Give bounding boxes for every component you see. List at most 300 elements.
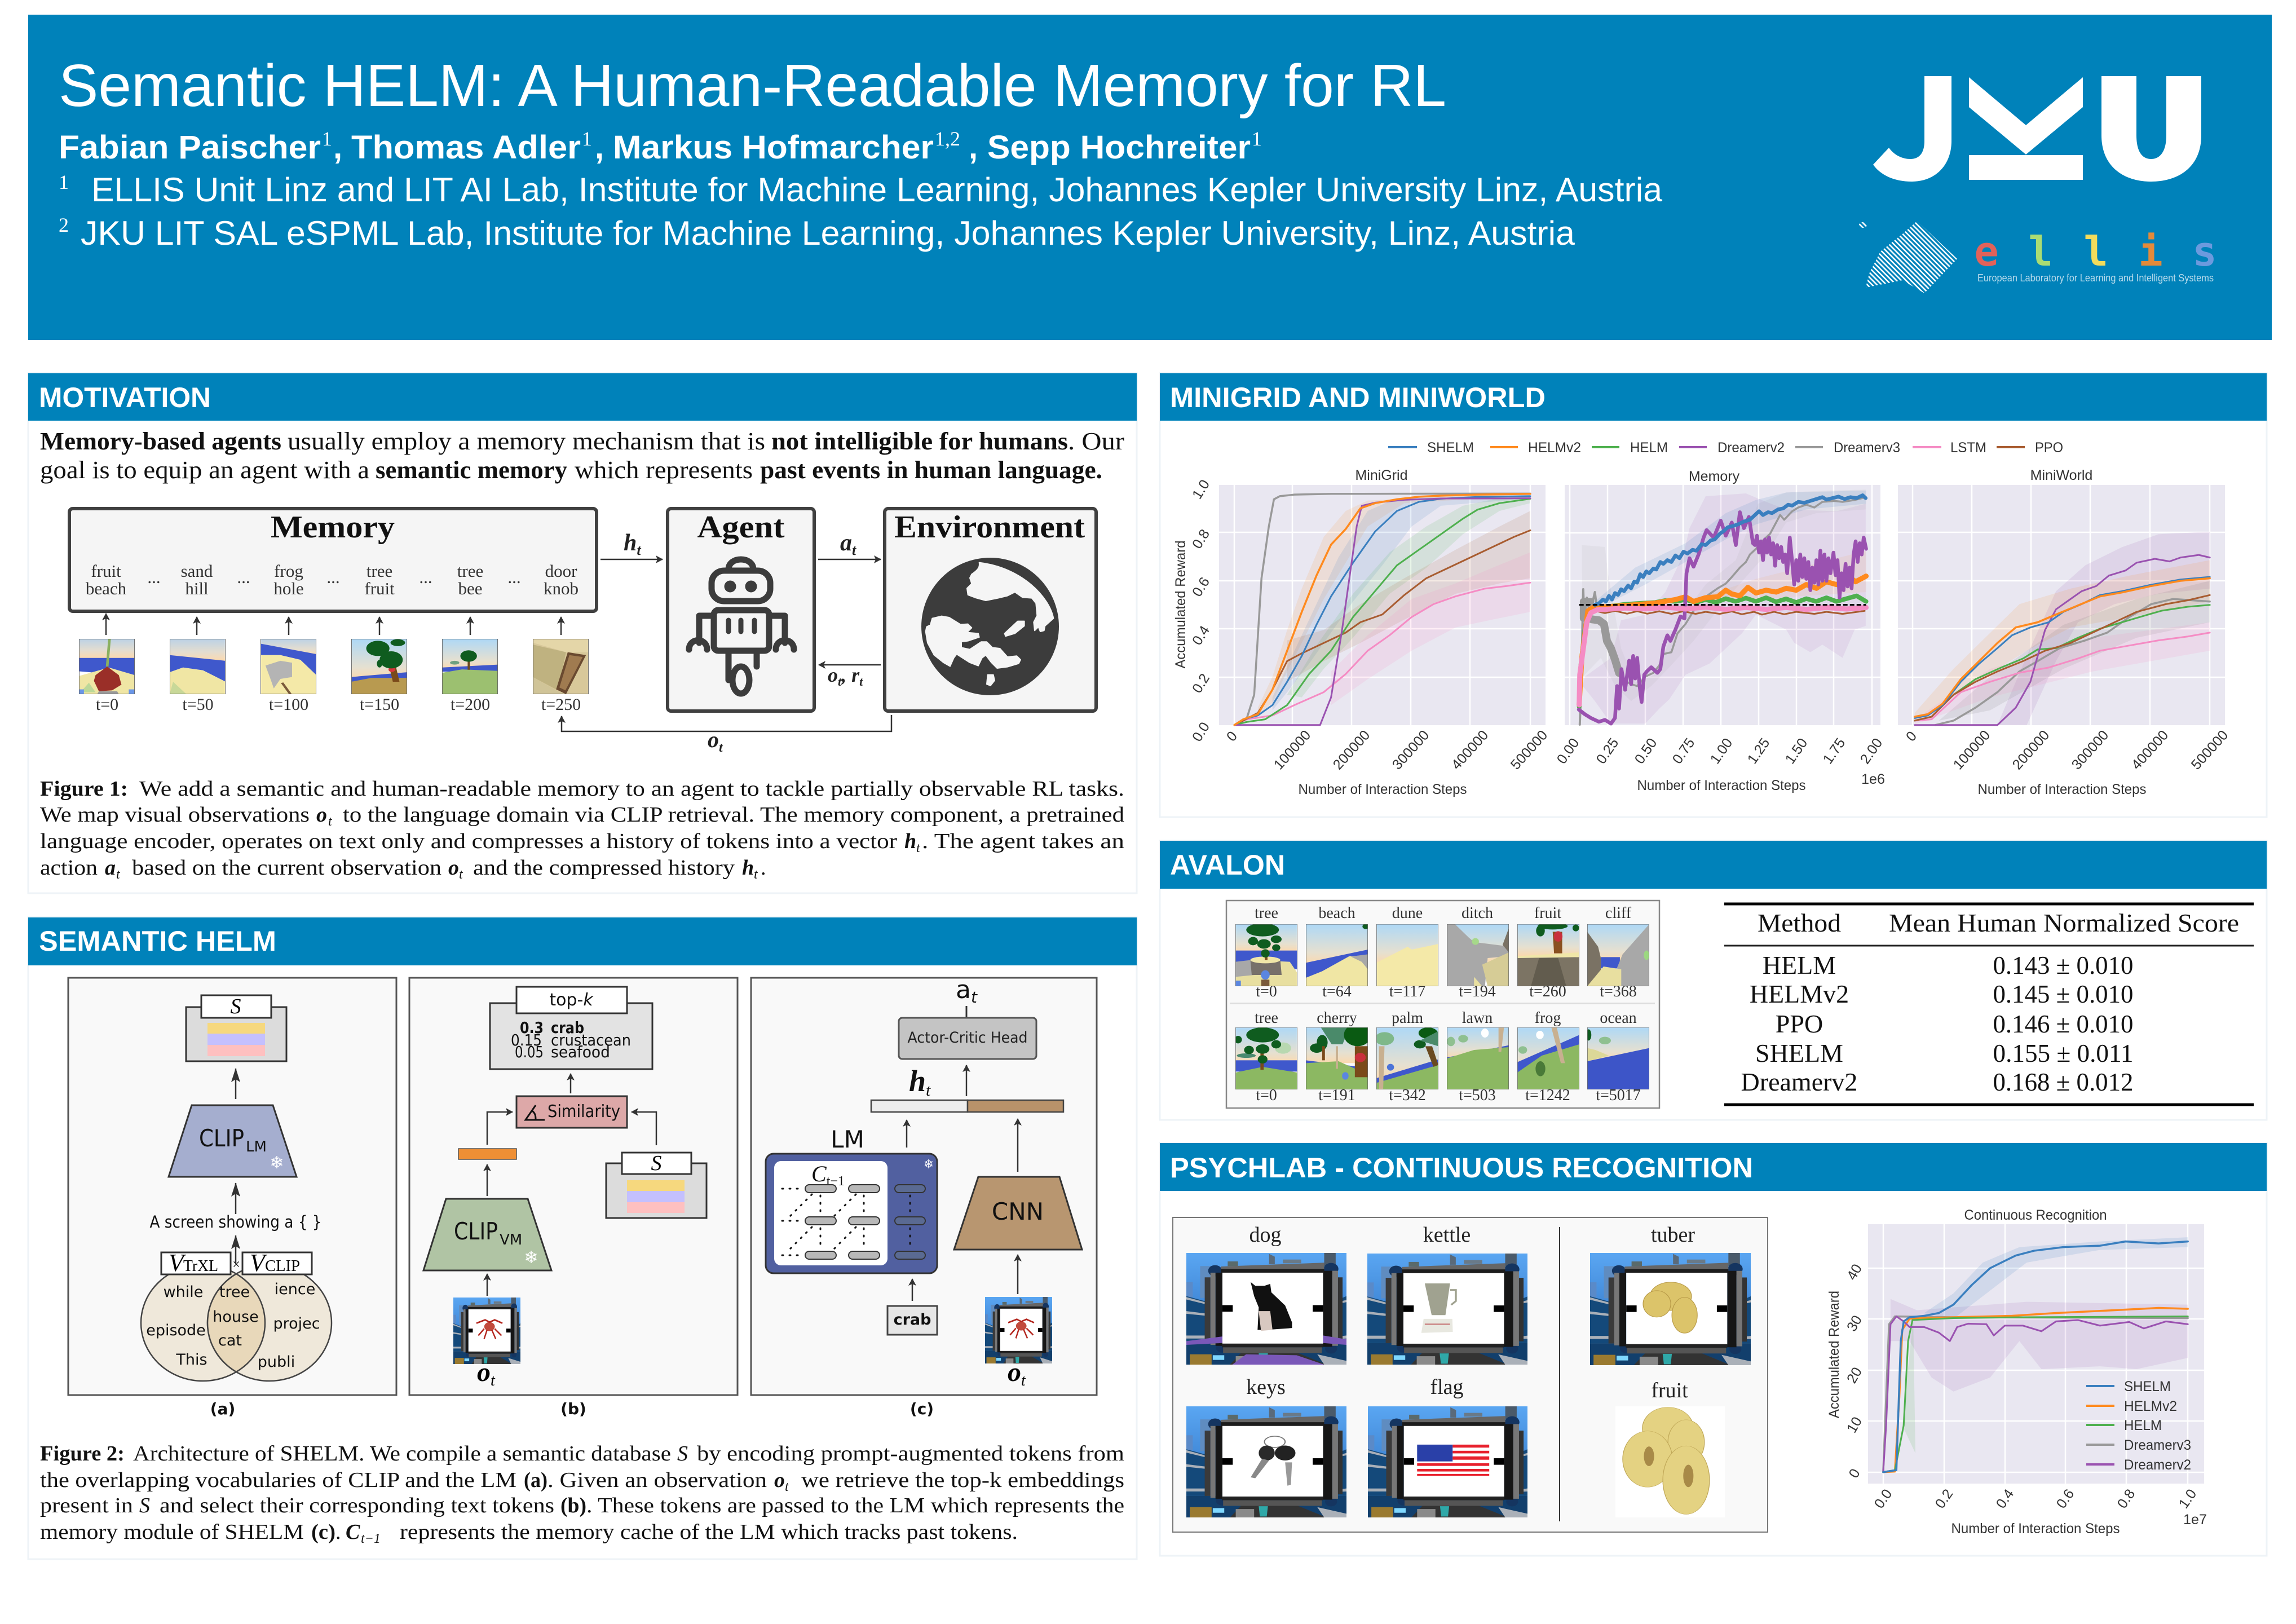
figure 1 caption: t xyxy=(754,867,758,882)
memory box: tree xyxy=(457,561,483,581)
memory box: bee xyxy=(458,579,483,598)
avalon top row words xyxy=(1255,904,1637,1000)
chart: continuous recognition: 0.4 xyxy=(1993,1486,2017,1511)
chart: minigrid: Number of Interaction Steps xyxy=(1298,782,1467,797)
authors: Sepp Hochreiter xyxy=(987,129,1251,166)
legend: PPO xyxy=(2035,440,2063,456)
figure 2 caption: Architecture of SHELM. We compile a semantic database xyxy=(133,1442,671,1466)
CLIP VM encoder: CLIP xyxy=(454,1217,498,1245)
chart: memory: 2.00 xyxy=(1857,735,1886,767)
memory box xyxy=(69,509,597,611)
top-k database: crab xyxy=(551,1018,584,1037)
arrow: a_t: a xyxy=(840,530,852,556)
results table: 0.145 ± 0.010 xyxy=(1993,979,2134,1008)
memory box: fruit xyxy=(91,561,121,581)
figure 2 caption: . Given an observation xyxy=(547,1468,767,1492)
image: keys xyxy=(1186,1406,1346,1517)
chart: minigrid: 300000 xyxy=(1389,727,1432,773)
avalon top row words: fruit xyxy=(1534,904,1561,922)
results table: PPO xyxy=(1776,1009,1823,1038)
figure 2 caption: t xyxy=(785,1480,789,1494)
figure 1 caption: o xyxy=(448,856,459,880)
venn diagram: CLIP xyxy=(265,1257,300,1275)
crab token xyxy=(888,1306,937,1335)
timestep labels: t=100 xyxy=(269,695,308,714)
arrow: a_t xyxy=(818,530,881,559)
memory box: beach xyxy=(86,579,127,598)
venn diagram: This xyxy=(175,1351,207,1369)
venn diagram: tree xyxy=(219,1283,250,1301)
venn diagram xyxy=(141,1249,332,1381)
top-k database: crustacean xyxy=(551,1031,631,1049)
top-k database xyxy=(490,987,652,1069)
results table: SHELM xyxy=(1755,1039,1843,1067)
motivation text: past events in human language. xyxy=(760,456,1102,484)
figure 1 caption: and the compressed history xyxy=(473,856,735,880)
chart: miniworld: 400000 xyxy=(2129,727,2171,773)
CNN encoder xyxy=(954,1177,1082,1250)
chart: miniworld: 200000 xyxy=(2010,727,2052,773)
arrow: o_t, r_t: t xyxy=(859,674,863,689)
psychlab word labels: flag xyxy=(1430,1375,1464,1399)
database S: S xyxy=(651,1151,662,1175)
results table: 0.168 ± 0.012 xyxy=(1993,1067,2134,1096)
logo: ellis: l xyxy=(2028,228,2053,275)
avalon top row words: beach xyxy=(1318,904,1355,922)
LM block: C xyxy=(811,1161,827,1186)
authors: , xyxy=(333,129,342,166)
logo: ellis: e xyxy=(1974,228,1999,275)
figure 1 caption: a xyxy=(105,856,116,880)
results table: Method xyxy=(1758,908,1841,937)
similarity box xyxy=(516,1096,627,1128)
memory box: ... xyxy=(147,567,161,587)
chart: minigrid: MiniGrid xyxy=(1355,467,1408,483)
timestep labels xyxy=(96,695,581,714)
motivation text: goal is to equip an agent with a xyxy=(40,456,369,484)
figure 2 caption: . These tokens are passed to the LM which represents the xyxy=(586,1494,1124,1517)
avalon top row words: t=260 xyxy=(1529,983,1566,1000)
avalon top row words: t=368 xyxy=(1600,983,1637,1000)
arrow: h_t: t xyxy=(637,542,641,558)
figure 1 caption: h xyxy=(742,856,754,880)
LM block xyxy=(766,1154,937,1273)
figure 2 caption: (b) xyxy=(560,1494,586,1517)
chart: minigrid: 400000 xyxy=(1449,727,1491,773)
heading: psychlab: PSYCHLAB - CONTINUOUS RECOGNITION xyxy=(1170,1152,1753,1184)
memory box: tree xyxy=(367,561,392,581)
avalon bottom row words xyxy=(1255,1009,1641,1104)
chart: memory: Memory xyxy=(1689,469,1740,484)
image: kettle xyxy=(1367,1254,1527,1365)
avalon bottom row words: frog xyxy=(1535,1009,1561,1027)
image: fruit xyxy=(1622,1407,1710,1515)
figure 2 caption: the overlapping vocabularies of CLIP and the LM xyxy=(40,1468,516,1492)
figure 1 caption: . The agent takes an xyxy=(922,829,1124,853)
arrow: o_t, r_t: o xyxy=(828,664,838,686)
avalon top row words: dune xyxy=(1392,904,1423,922)
authors: Fabian Paischer xyxy=(59,129,321,166)
figure 1 caption: We map visual observations xyxy=(40,803,310,827)
figure 2 caption: S xyxy=(139,1494,150,1517)
avalon top row words: t=194 xyxy=(1459,983,1496,1000)
venn diagram: ience xyxy=(275,1281,315,1298)
affiliation 2: 2 xyxy=(59,214,69,236)
venn diagram: projec xyxy=(273,1315,320,1332)
arrow: o_t, r_t: , r xyxy=(841,664,860,686)
icon: globe xyxy=(921,558,1059,695)
image: tuber xyxy=(1590,1253,1751,1365)
chart: continuous recognition: Number of Interaction Steps xyxy=(1951,1521,2120,1537)
chart: memory: 1e6 xyxy=(1861,771,1885,787)
LM block: t−1 xyxy=(827,1174,845,1189)
motivation text: . Our xyxy=(1068,427,1124,455)
legend: Dreamerv2 xyxy=(1717,440,1785,456)
LM label: LM xyxy=(831,1126,864,1153)
h_t label: t xyxy=(926,1081,931,1100)
chart: minigrid: 200000 xyxy=(1330,727,1373,773)
avalon bottom row words: t=503 xyxy=(1459,1087,1496,1104)
chart: miniworld: MiniWorld xyxy=(2030,467,2092,483)
chart: minigrid: 0.0 xyxy=(1189,720,1213,744)
chart: continuous recognition: 1.0 xyxy=(2176,1486,2200,1511)
label (a): (a) xyxy=(210,1400,235,1418)
figure 2 caption: S xyxy=(677,1442,688,1466)
chart: minigrid: 0.2 xyxy=(1189,671,1213,696)
LM block: ❄ xyxy=(924,1158,934,1172)
figure 1 caption: We add a semantic and human-readable memory to an agent to tackle partially observable RL tasks. xyxy=(139,777,1124,801)
timestep labels: t=200 xyxy=(451,695,490,714)
avalon bottom row words: palm xyxy=(1392,1009,1423,1027)
chart legend: Dreamerv3 xyxy=(2124,1437,2191,1453)
chart: miniworld: 300000 xyxy=(2069,727,2112,773)
venn diagram: episode xyxy=(146,1322,206,1339)
memory box: fruit xyxy=(364,579,395,598)
chart: continuous recognition: 1e7 xyxy=(2183,1512,2207,1528)
database S xyxy=(186,995,286,1061)
authors: Markus Hofmarcher xyxy=(613,129,934,166)
figure 1 caption: t xyxy=(916,841,921,855)
psychlab word labels: kettle xyxy=(1423,1223,1471,1247)
memory box: hole xyxy=(273,579,304,598)
avalon bottom row words: t=0 xyxy=(1256,1087,1277,1104)
memory box: ... xyxy=(326,567,340,587)
agent box: Agent xyxy=(697,510,785,545)
venn diagram: V xyxy=(169,1249,187,1277)
results table: Mean Human Normalized Score xyxy=(1889,908,2239,937)
venn diagram: × xyxy=(232,1257,240,1272)
figure 1 caption: o xyxy=(316,803,327,827)
chart: continuous recognition xyxy=(1826,1207,2207,1537)
prompt text: A screen showing a { } xyxy=(150,1212,321,1232)
panel: minigrid and miniworld xyxy=(1160,373,2267,817)
venn diagram: publi xyxy=(258,1353,295,1371)
memory box: door xyxy=(545,561,577,581)
chart: minigrid: 0 xyxy=(1224,728,1240,745)
database S: S xyxy=(230,995,241,1018)
sub-figure c: agent architecture xyxy=(751,976,1097,1395)
legend: HELM xyxy=(1630,440,1668,456)
chart: memory: 1.25 xyxy=(1745,735,1773,767)
top-k database: 0.3 xyxy=(520,1018,544,1037)
chart legend: HELM xyxy=(2124,1418,2162,1433)
chart legend: HELMv2 xyxy=(2124,1398,2177,1414)
chart: minigrid: Accumulated Reward xyxy=(1173,540,1189,669)
logo: JKU xyxy=(1873,76,2201,182)
legend: SHELM xyxy=(1427,440,1474,456)
chart: continuous recognition: 0.2 xyxy=(1932,1486,1956,1511)
motivation text: Memory-based agents xyxy=(40,427,281,455)
results table: 0.146 ± 0.010 xyxy=(1993,1009,2134,1038)
chart: memory: 1.75 xyxy=(1820,735,1848,767)
header banner xyxy=(28,15,2272,340)
authors: , xyxy=(969,129,978,166)
figure 1 caption: t xyxy=(116,867,121,882)
panel: motivation xyxy=(28,373,1137,893)
figure 2 caption: we retrieve the top-k embeddings xyxy=(801,1468,1124,1492)
results table: HELM xyxy=(1763,951,1836,979)
logo: ellis: s xyxy=(2192,228,2217,275)
arrow: h_t xyxy=(601,530,663,559)
chart legend xyxy=(2086,1379,2191,1473)
chart: minigrid: 0.8 xyxy=(1189,527,1213,551)
o_t label: o xyxy=(1008,1357,1021,1387)
CLIP VM encoder: ❄ xyxy=(524,1248,538,1268)
legend: Dreamerv3 xyxy=(1834,440,1900,456)
figure 2 caption: t−1 xyxy=(361,1532,381,1546)
chart: minigrid: 100000 xyxy=(1271,727,1314,773)
figure 2 caption: C xyxy=(346,1520,360,1544)
chart: continuous recognition: Accumulated Reward xyxy=(1826,1291,1842,1418)
actor-critic head: Actor-Critic Head xyxy=(908,1029,1027,1047)
image: dog xyxy=(1186,1253,1346,1365)
avalon bottom row words: t=5017 xyxy=(1596,1087,1641,1104)
authors: 1 xyxy=(322,127,332,150)
timestep labels: t=250 xyxy=(541,695,581,714)
memory box: hill xyxy=(185,579,209,598)
arrow: o_t, r_t xyxy=(819,664,881,689)
chart: minigrid: 0.6 xyxy=(1189,575,1213,599)
o_t label: t xyxy=(491,1372,496,1389)
chart: continuous recognition: 0.6 xyxy=(2054,1486,2077,1511)
chart legend: Dreamerv2 xyxy=(2124,1457,2191,1473)
authors: Thomas Adler xyxy=(351,129,581,166)
icon: robot xyxy=(689,559,794,694)
figure 2 caption: by encoding prompt-augmented tokens from xyxy=(697,1442,1124,1466)
figure 2 caption: and select their corresponding text tokens xyxy=(160,1494,554,1517)
figure 1 caption: t xyxy=(328,814,333,829)
chart: continuous recognition: 30 xyxy=(1844,1313,1865,1334)
avalon top row words: cliff xyxy=(1605,904,1632,922)
chart: continuous recognition: 0.0 xyxy=(1871,1486,1895,1511)
figure 1 caption: action xyxy=(40,856,98,880)
memory frame arrows xyxy=(106,614,561,635)
a_t output: t xyxy=(971,988,978,1007)
chart legend: SHELM xyxy=(2124,1379,2171,1394)
authors: 1,2 xyxy=(935,127,960,150)
observation image xyxy=(985,1297,1052,1363)
figure 2 caption: Figure 2: xyxy=(40,1442,125,1466)
heading: motivation: MOTIVATION xyxy=(39,382,211,413)
arrow: a_t: t xyxy=(852,542,856,558)
figure 1 caption: Figure 1: xyxy=(40,777,128,801)
chart: continuous recognition: Continuous Recognition xyxy=(1964,1207,2107,1223)
psychlab word labels: keys xyxy=(1246,1375,1286,1399)
avalon bottom row words: tree xyxy=(1255,1009,1278,1027)
panel: semantic helm xyxy=(28,917,1137,1559)
legend: HELMv2 xyxy=(1528,440,1581,456)
arrow: o_t, r_t: t xyxy=(838,674,842,689)
figure 2 caption: (a) xyxy=(524,1468,547,1492)
avalon bottom row words: t=342 xyxy=(1389,1087,1426,1104)
affiliation 1: ELLIS Unit Linz and LIT AI Lab, Institute for Machine Learning, Johannes Kepler University Linz, Austria xyxy=(91,171,1663,209)
memory box: ... xyxy=(419,567,432,587)
logo: ellis: i xyxy=(2138,228,2163,275)
avalon top row words: t=117 xyxy=(1389,983,1425,1000)
agent box xyxy=(668,509,814,711)
motivation text: not intelligible for humans xyxy=(771,427,1068,455)
a_t output: a xyxy=(956,976,971,1004)
actor-critic head xyxy=(899,1018,1036,1059)
h_t label: h xyxy=(909,1064,926,1098)
timestep labels: t=50 xyxy=(182,695,214,714)
chart: memory: 1.00 xyxy=(1707,735,1736,767)
avalon image grid xyxy=(1226,901,1659,1108)
legend: LSTM xyxy=(1950,440,1986,456)
chart: continuous recognition: 40 xyxy=(1844,1261,1865,1283)
label (c): (c) xyxy=(910,1400,934,1418)
logo: ellis: European Laboratory for Learning and Intelligent Systems xyxy=(1977,272,2214,284)
avalon top row images xyxy=(1235,923,1649,986)
sub-figure a: database construction xyxy=(68,978,396,1395)
CLIP LM encoder xyxy=(169,1105,297,1177)
memory box: ... xyxy=(507,567,521,587)
psychlab word labels xyxy=(1246,1223,1695,1402)
avalon bottom row images xyxy=(1234,1023,1649,1089)
label (b): (b) xyxy=(560,1400,586,1418)
memory box: ... xyxy=(237,567,250,587)
chart: memory: 0.25 xyxy=(1593,735,1622,767)
avalon bottom row words: ocean xyxy=(1600,1009,1637,1027)
memory box: Memory xyxy=(271,510,395,545)
concatenated vector xyxy=(871,1100,1063,1112)
top-k database: 0.15 xyxy=(511,1031,542,1049)
avalon bottom row words: cherry xyxy=(1317,1009,1357,1027)
venn diagram: TrXL xyxy=(183,1257,218,1275)
avalon top row words: t=0 xyxy=(1256,983,1277,1000)
chart: continuous recognition: 0.8 xyxy=(2114,1486,2138,1511)
chart: memory: 0.75 xyxy=(1670,735,1698,767)
CLIP LM encoder: LM xyxy=(246,1138,267,1155)
figure 2 caption: (c) xyxy=(311,1520,335,1544)
authors: , xyxy=(595,129,604,166)
chart: memory xyxy=(1554,469,1886,793)
figure 2 caption: present in xyxy=(40,1494,133,1517)
observation image xyxy=(453,1298,520,1364)
motivation text: semantic memory xyxy=(376,456,567,484)
avalon top row words: tree xyxy=(1255,904,1278,922)
figure 1 caption: t xyxy=(459,867,463,882)
chart: miniworld: 500000 xyxy=(2188,727,2231,773)
CNN encoder: CNN xyxy=(992,1198,1044,1225)
authors: 1 xyxy=(582,127,592,150)
results table: HELMv2 xyxy=(1750,979,1849,1008)
psychlab word labels: tuber xyxy=(1651,1223,1695,1247)
results table xyxy=(1724,904,2254,1105)
psychlab word labels: dog xyxy=(1249,1223,1281,1247)
avalon top row words: ditch xyxy=(1462,904,1493,922)
affiliation 2: JKU LIT SAL eSPML Lab, Institute for Machine Learning, Johannes Kepler University, Linz, Austria xyxy=(81,214,1575,252)
chart: minigrid xyxy=(1173,467,1551,797)
o_t label: t xyxy=(1021,1372,1026,1389)
heading: avalon: AVALON xyxy=(1170,849,1285,881)
CLIP VM encoder: VM xyxy=(500,1232,522,1248)
arrow: o_t loop xyxy=(562,715,891,755)
chart: continuous recognition: 0 xyxy=(1845,1466,1864,1481)
panel: psychlab continuous recognition xyxy=(1160,1143,2267,1556)
chart: miniworld xyxy=(1898,467,2231,797)
venn diagram: V xyxy=(250,1249,268,1277)
chart: minigrid: 500000 xyxy=(1508,727,1551,773)
figure 1 caption: language encoder, operates on text only and compresses a history of tokens into a vector xyxy=(40,829,897,853)
chart: memory: 0.50 xyxy=(1632,735,1660,767)
environment box: Environment xyxy=(894,510,1085,545)
psychlab word labels: fruit xyxy=(1651,1379,1688,1402)
figure 1 caption: to the language domain via CLIP retrieval. The memory component, a pretrained xyxy=(343,803,1124,827)
chart: memory: 1.50 xyxy=(1782,735,1811,767)
title: Semantic HELM: A Human-Readable Memory for RL xyxy=(59,52,1446,119)
authors: 1 xyxy=(1252,127,1262,150)
figure 1 caption: based on the current observation xyxy=(132,856,441,880)
logo: ellis xyxy=(1859,221,2217,293)
chart: miniworld: Number of Interaction Steps xyxy=(1978,782,2146,797)
crab token: crab xyxy=(894,1311,931,1329)
arrow: o_t loop: o xyxy=(708,727,719,752)
avalon bottom row words: t=1242 xyxy=(1525,1087,1570,1104)
motivation text: which represents xyxy=(575,456,753,484)
timestep labels: t=150 xyxy=(360,695,399,714)
timestep labels: t=0 xyxy=(96,695,118,714)
affiliation 1: 1 xyxy=(59,171,69,193)
results table: Dreamerv2 xyxy=(1741,1067,1857,1096)
chart: memory: Number of Interaction Steps xyxy=(1637,778,1805,793)
memory box: knob xyxy=(544,579,579,598)
panel: avalon xyxy=(1160,841,2267,1120)
o_t label: o xyxy=(477,1357,491,1387)
chart: continuous recognition: 20 xyxy=(1844,1365,1865,1386)
chart: minigrid: 1.0 xyxy=(1189,477,1213,502)
memory box: sand xyxy=(181,561,213,581)
figure 1 caption: . xyxy=(761,856,766,880)
venn diagram: cat xyxy=(218,1332,242,1349)
arrow: o_t loop: t xyxy=(719,740,723,755)
top-k database: top-k xyxy=(549,990,594,1010)
heading: semantic helm: SEMANTIC HELM xyxy=(39,925,276,957)
chart: memory: 0.00 xyxy=(1554,735,1582,767)
chart: minigrid: 0.4 xyxy=(1189,623,1213,648)
similarity box: Similarity xyxy=(547,1102,620,1122)
image: flag xyxy=(1368,1406,1527,1517)
results table: 0.143 ± 0.010 xyxy=(1993,951,2134,979)
memory observation frames xyxy=(79,639,589,694)
avalon top row words: t=64 xyxy=(1322,983,1352,1000)
avalon bottom row words: lawn xyxy=(1462,1009,1493,1027)
CLIP LM encoder: CLIP xyxy=(199,1124,244,1152)
chart: miniworld: 0 xyxy=(1903,728,1920,745)
authors xyxy=(59,127,1262,166)
psychlab image grid xyxy=(1173,1217,1768,1532)
figure 1: agent diagram xyxy=(69,509,1096,755)
